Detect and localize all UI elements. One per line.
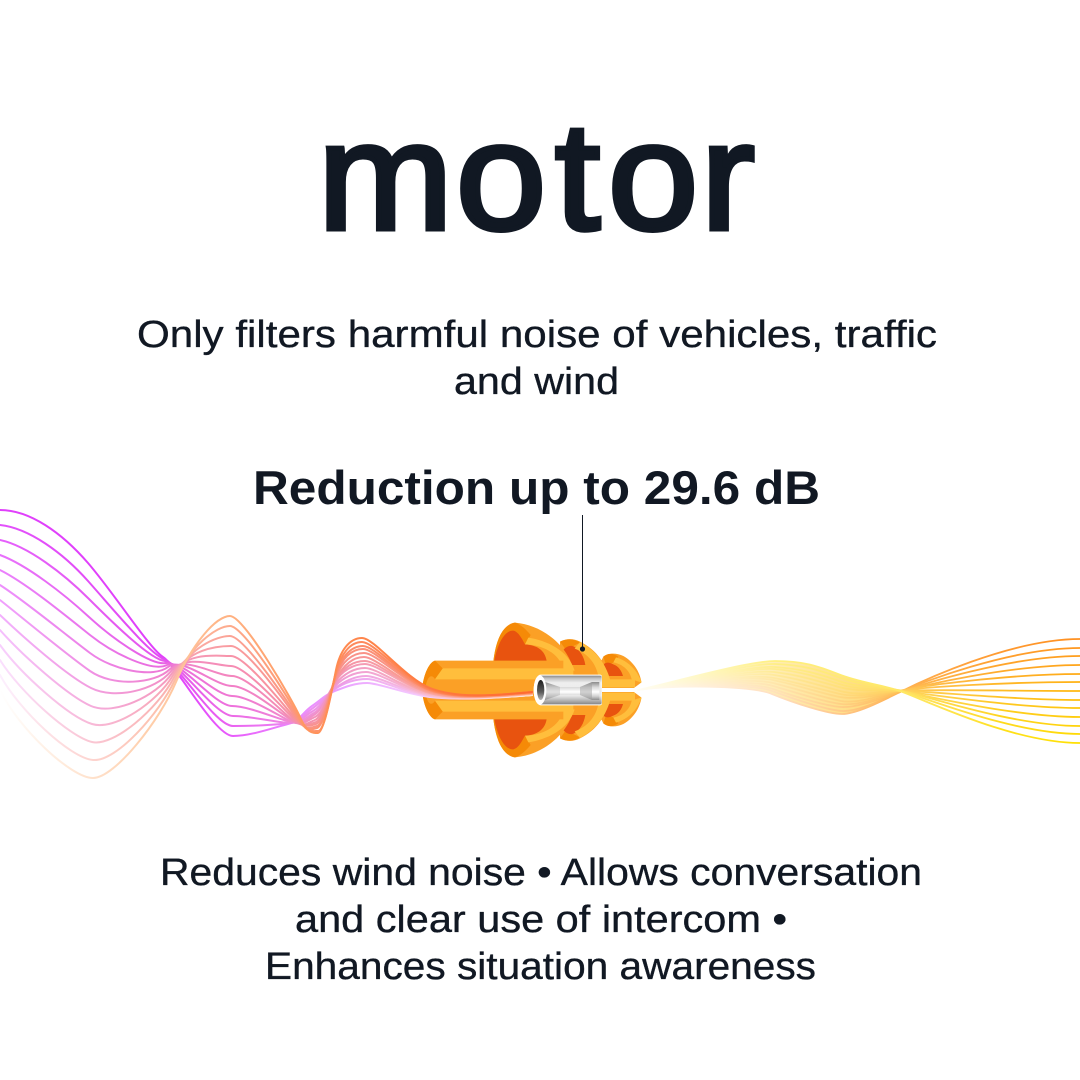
callout leader line [580,515,585,652]
sound wave: filtered output, right [638,639,1080,743]
sound wave: input noise, left [0,510,532,778]
metal filter [534,675,602,705]
benefits text [160,852,922,988]
title: motor [318,91,755,262]
description text: and wind [454,361,619,403]
benefits text: Reduces wind noise • Allows conversation [160,852,922,894]
description text [137,314,937,403]
description text: Only filters harmful noise of vehicles, traffic [137,314,937,356]
benefits text: Enhances situation awareness [265,946,816,988]
noise reduction heading: Reduction up to 29.6 dB [253,461,820,514]
earplug body [422,623,642,757]
benefits text: and clear use of intercom • [295,899,787,941]
